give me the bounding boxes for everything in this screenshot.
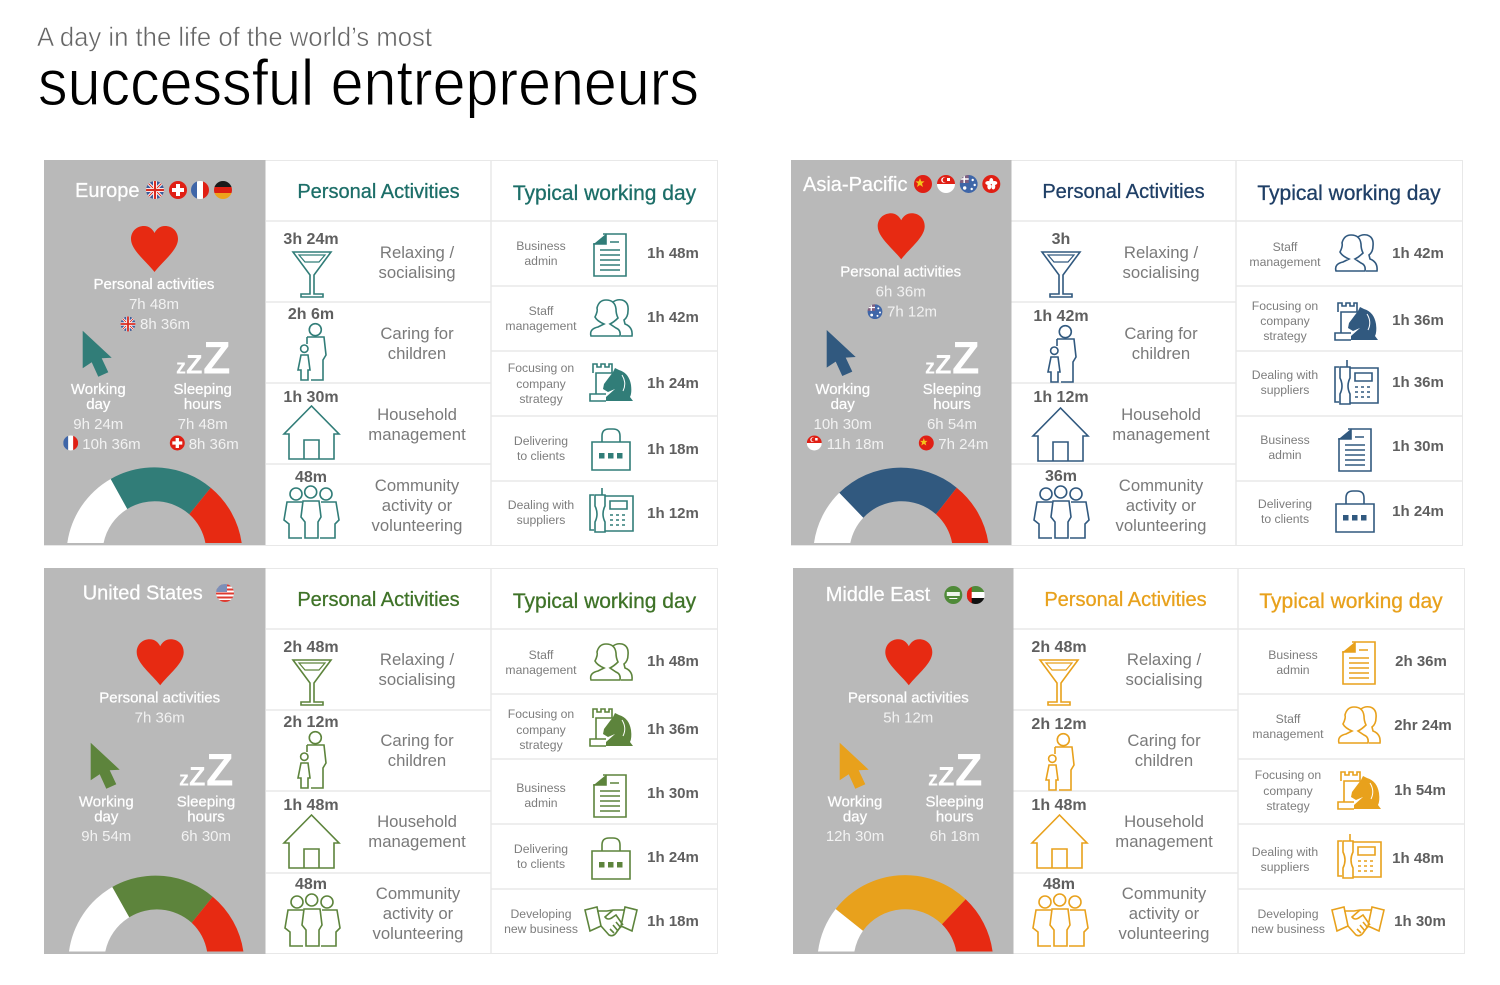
row: community: Community: [375, 476, 460, 495]
row: staff: [505, 644, 699, 680]
row: strategy: 1h 24m: [647, 375, 699, 392]
row: relaxing: [283, 231, 455, 297]
working day stat: day: [86, 396, 111, 413]
row: relaxing: 3h 24m: [283, 231, 339, 248]
row: community: activity or: [1126, 496, 1197, 515]
row: household: management: [368, 425, 466, 444]
working day stat: Working: [71, 381, 126, 398]
personal activities column: Asia-Pacific: [1033, 181, 1210, 538]
row: clients: [514, 838, 699, 879]
row: staff: Staff: [529, 304, 554, 318]
icon: heart: [885, 639, 932, 685]
row: relaxing: socialising: [379, 263, 455, 282]
heading: Personal Activities: [1044, 589, 1207, 611]
row: community: 48m: [295, 469, 327, 486]
row: community: 48m: [295, 876, 327, 893]
row: children: children: [388, 751, 446, 770]
icon: sleep: Z: [206, 745, 234, 796]
region name: Europe: [75, 180, 140, 202]
region name: Asia-Pacific: [803, 174, 907, 196]
row: strategy: company: [516, 377, 567, 391]
row: business admin: admin: [1276, 663, 1310, 677]
row: clients: [1258, 491, 1444, 532]
row: household: 1h 48m: [1031, 797, 1087, 814]
working day stat: Working: [828, 793, 882, 810]
row: clients: 1h 24m: [1392, 503, 1444, 520]
row: children: 2h 12m: [1031, 716, 1087, 733]
row: children: 2h 6m: [288, 306, 334, 323]
sleeping hours stat: 6h 54m: [927, 416, 977, 433]
row: business admin: 1h 30m: [647, 785, 699, 802]
row: clients: to clients: [517, 449, 565, 463]
summary column: Middle East: [793, 568, 1014, 954]
working day stat: 10h 30m: [814, 416, 872, 433]
icon: sleep: Z: [935, 349, 952, 379]
row: community: Community: [1119, 476, 1204, 495]
row: household: [1033, 389, 1210, 461]
sleeping hours stat: hours: [936, 809, 973, 826]
row: household: management: [1112, 425, 1210, 444]
icon: cursor: [83, 331, 112, 377]
icon: sleep: z: [176, 356, 186, 378]
icon: heart: [878, 213, 925, 259]
row: strategy: strategy: [519, 738, 564, 752]
summary column: Europe: [44, 160, 266, 545]
personal activities stat: [848, 690, 969, 727]
row: new business: 1h 18m: [647, 913, 699, 930]
row: relaxing: [283, 639, 455, 705]
working day stat: [807, 381, 884, 453]
working day stat: Working: [815, 381, 870, 398]
row: new business: [504, 907, 699, 936]
row: clients: Delivering: [514, 842, 568, 856]
row: relaxing: [1042, 231, 1199, 297]
personal activities stat: Personal activities: [94, 276, 214, 293]
typical working day column: Asia-Pacific: [1249, 182, 1444, 532]
row: business admin: 1h 30m: [1392, 438, 1444, 455]
row: community: activity or: [382, 496, 453, 515]
row: children: [283, 714, 454, 788]
flags: [944, 586, 985, 604]
row: suppliers: [1252, 360, 1444, 404]
row: strategy: Focusing on: [1255, 768, 1321, 782]
row: clients: [514, 429, 699, 470]
flag: [216, 584, 234, 602]
row: business admin: 2h 36m: [1395, 653, 1447, 670]
personal activities stat: [99, 690, 220, 727]
working day stat: [63, 381, 141, 453]
personal activities stat: 8h 36m: [140, 316, 190, 333]
panel: Asia-Pacific: [791, 160, 1462, 546]
row: household: [1031, 797, 1213, 868]
row: household: [283, 389, 466, 459]
row: new business: new business: [504, 922, 578, 936]
icon: sleep: z: [925, 356, 935, 378]
region name: United States: [83, 583, 203, 605]
flags: [146, 181, 232, 199]
title: successful entrepreneurs: [38, 46, 699, 119]
row: clients: to clients: [517, 857, 565, 871]
personal activities stat: Personal activities: [848, 690, 969, 707]
row: children: children: [1132, 344, 1190, 363]
row: community: [284, 469, 462, 538]
icon: sleep: Z: [938, 762, 954, 792]
working day stat: day: [843, 809, 868, 826]
row: strategy: 1h 36m: [647, 721, 699, 738]
row: community: volunteering: [1119, 924, 1209, 943]
row: business admin: [1268, 642, 1447, 684]
row: staff: 1h 48m: [647, 653, 699, 670]
row: children: children: [1135, 751, 1193, 770]
row: community: volunteering: [372, 516, 462, 535]
row: community: activity or: [1129, 904, 1200, 923]
subtitle: A day in the life of the world’s most: [37, 22, 432, 52]
icon: sleep: Z: [952, 332, 980, 383]
row: relaxing: Relaxing /: [380, 650, 454, 669]
working day stat: 9h 54m: [81, 828, 131, 845]
row: staff: management: [505, 663, 577, 677]
personal activities stat: 7h 36m: [135, 710, 185, 727]
icon: heart: [137, 639, 184, 685]
panel: United States: [44, 568, 718, 954]
heading: Personal Activities: [297, 181, 460, 203]
personal activities stat: [94, 276, 214, 333]
row: community: volunteering: [373, 924, 463, 943]
row: relaxing: 2h 48m: [1031, 639, 1087, 656]
personal activities stat: 5h 12m: [883, 710, 933, 727]
row: strategy: strategy: [1266, 799, 1311, 813]
row: community: 36m: [1045, 468, 1077, 485]
row: household: 1h 30m: [283, 389, 339, 406]
icon: sleep: z: [928, 769, 938, 791]
working day stat: 10h 36m: [82, 436, 141, 453]
row: household: management: [368, 832, 466, 851]
row: staff: management: [1252, 727, 1324, 741]
row: staff: Staff: [529, 648, 554, 662]
row: relaxing: 3h: [1052, 231, 1070, 248]
row: strategy: [508, 361, 699, 406]
icon: cursor: [827, 330, 856, 376]
row: children: Caring for: [1124, 324, 1198, 343]
row: household: [283, 797, 466, 868]
icon: sleep: z: [179, 769, 189, 791]
working day stat: day: [94, 809, 119, 826]
row: children: 2h 12m: [283, 714, 339, 731]
row: community: 48m: [1043, 876, 1075, 893]
row: suppliers: [508, 488, 699, 532]
heading: Typical working day: [1257, 182, 1441, 205]
typical working day column: Middle East: [1251, 590, 1452, 936]
personal activities stat: Personal activities: [99, 690, 220, 707]
personal activities stat: 7h 48m: [129, 296, 179, 313]
sleeping hours stat: Sleeping: [177, 793, 235, 810]
sleeping hours stat: Sleeping: [174, 381, 232, 398]
row: business admin: Business: [1268, 648, 1318, 662]
panel: Middle East: [793, 568, 1464, 954]
row: strategy: Focusing on: [508, 707, 574, 721]
gauge chart: [814, 468, 988, 543]
row: relaxing: Relaxing /: [1127, 650, 1201, 669]
row: relaxing: [1031, 639, 1202, 705]
heading: Personal Activities: [1042, 181, 1205, 203]
row: children: 1h 42m: [1033, 308, 1089, 325]
row: relaxing: socialising: [379, 670, 455, 689]
working day stat: [79, 793, 134, 845]
row: staff: [1249, 235, 1444, 271]
heading: Typical working day: [1259, 590, 1443, 613]
row: suppliers: suppliers: [1261, 383, 1309, 397]
sleeping hours stat: 7h 48m: [178, 416, 228, 433]
icon: sleep: Z: [203, 332, 230, 383]
row: community: Community: [1122, 884, 1207, 903]
row: children: [288, 306, 454, 380]
row: strategy: [1252, 299, 1444, 343]
sleeping hours stat: hours: [187, 809, 225, 826]
working day stat: 11h 18m: [827, 436, 884, 453]
sleeping hours stat: 6h 30m: [181, 828, 231, 845]
row: clients: Delivering: [514, 434, 568, 448]
region name: Middle East: [826, 584, 931, 606]
row: community: Community: [376, 884, 461, 903]
row: relaxing: 2h 48m: [283, 639, 339, 656]
sleeping hours stat: 7h 24m: [938, 436, 988, 453]
icon: cursor: [91, 743, 120, 789]
icon: sleep: Z: [189, 762, 206, 792]
sleeping hours stat: 6h 18m: [930, 828, 980, 845]
row: children: Caring for: [1127, 731, 1201, 750]
sleeping hours stat: hours: [933, 396, 971, 413]
personal activities column: United States: [283, 589, 466, 946]
row: household: 1h 12m: [1033, 389, 1089, 406]
row: strategy: Focusing on: [1252, 299, 1318, 313]
row: staff: [505, 300, 699, 336]
row: new business: [1251, 907, 1446, 936]
row: children: [1031, 716, 1201, 790]
icon: heart: [131, 226, 178, 272]
row: staff: 1h 42m: [647, 309, 699, 326]
row: business admin: admin: [524, 796, 558, 810]
typical working day column: United States: [504, 590, 699, 936]
heading: Typical working day: [513, 182, 697, 205]
row: strategy: strategy: [1263, 329, 1308, 343]
row: business admin: 1h 48m: [647, 245, 699, 262]
row: strategy: company: [516, 723, 567, 737]
working day stat: [826, 793, 884, 845]
row: business admin: [516, 234, 699, 276]
row: new business: 1h 30m: [1394, 913, 1446, 930]
row: strategy: [1255, 768, 1446, 813]
sleeping hours stat: 8h 36m: [189, 436, 239, 453]
row: suppliers: 1h 36m: [1392, 374, 1444, 391]
flags: [914, 175, 1000, 193]
personal activities column: Middle East: [1031, 589, 1213, 946]
row: clients: Delivering: [1258, 497, 1312, 511]
summary column: United States: [44, 568, 266, 954]
row: community: [1033, 876, 1209, 946]
row: household: Household: [377, 405, 457, 424]
row: clients: to clients: [1261, 512, 1309, 526]
working day stat: 9h 24m: [73, 416, 123, 433]
row: staff: 2hr 24m: [1394, 717, 1452, 734]
row: strategy: strategy: [519, 392, 564, 406]
row: children: [1033, 308, 1198, 382]
row: business admin: [516, 775, 699, 817]
working day stat: 12h 30m: [826, 828, 884, 845]
row: suppliers: Dealing with: [1252, 845, 1318, 859]
sleeping hours stat: hours: [184, 396, 221, 413]
row: staff: [1252, 707, 1452, 743]
row: strategy: 1h 36m: [1392, 312, 1444, 329]
summary column: Asia-Pacific: [791, 160, 1012, 545]
sleeping hours stat: [919, 381, 988, 453]
row: household: Household: [377, 812, 457, 831]
row: strategy: Focusing on: [508, 361, 574, 375]
row: relaxing: socialising: [1123, 263, 1199, 282]
row: business admin: [1260, 429, 1444, 471]
typical working day column: Europe: [505, 182, 699, 532]
sleeping hours stat: Sleeping: [926, 793, 984, 810]
row: community: [1034, 468, 1206, 538]
row: suppliers: suppliers: [1261, 860, 1309, 874]
personal activities stat: Personal activities: [840, 263, 961, 280]
row: children: children: [388, 344, 446, 363]
row: staff: management: [1249, 255, 1321, 269]
gauge chart: [67, 467, 242, 543]
row: community: activity or: [383, 904, 454, 923]
row: strategy: [508, 707, 699, 752]
row: suppliers: suppliers: [517, 513, 565, 527]
row: new business: Developing: [511, 907, 571, 921]
icon: cursor: [840, 743, 869, 789]
row: community: volunteering: [1116, 516, 1206, 535]
row: clients: 1h 24m: [647, 849, 699, 866]
row: business admin: admin: [1268, 448, 1302, 462]
row: business admin: Business: [1260, 433, 1310, 447]
row: suppliers: Dealing with: [508, 498, 574, 512]
row: suppliers: 1h 48m: [1392, 850, 1444, 867]
row: suppliers: 1h 12m: [647, 505, 699, 522]
heading: Personal Activities: [297, 589, 460, 611]
sleeping hours stat: [926, 793, 984, 845]
row: business admin: Business: [516, 781, 566, 795]
row: household: 1h 48m: [283, 797, 339, 814]
row: business admin: admin: [524, 254, 558, 268]
personal activities stat: [840, 263, 961, 321]
row: relaxing: socialising: [1126, 670, 1202, 689]
personal activities stat: 7h 12m: [887, 304, 937, 321]
personal activities column: Europe: [283, 181, 466, 538]
icon: sleep: Z: [955, 745, 982, 796]
heading: Typical working day: [513, 590, 697, 613]
row: household: Household: [1124, 812, 1204, 831]
row: new business: new business: [1251, 922, 1325, 936]
row: strategy: company: [1260, 314, 1311, 328]
panel: Europe: [44, 160, 718, 546]
row: strategy: 1h 54m: [1394, 782, 1446, 799]
row: household: management: [1115, 832, 1213, 851]
row: suppliers: [1252, 834, 1444, 878]
row: staff: Staff: [1276, 712, 1301, 726]
row: children: Caring for: [380, 324, 454, 343]
row: staff: 1h 42m: [1392, 245, 1444, 262]
row: staff: Staff: [1273, 240, 1298, 254]
gauge chart: [818, 875, 993, 952]
row: business admin: Business: [516, 239, 566, 253]
working day stat: Working: [79, 793, 134, 810]
icon: sleep: Z: [186, 349, 202, 379]
sleeping hours stat: Sleeping: [923, 381, 981, 398]
sleeping hours stat: [170, 381, 239, 453]
row: suppliers: Dealing with: [1252, 368, 1318, 382]
gauge chart: [69, 876, 243, 952]
row: community: [285, 876, 463, 946]
sleeping hours stat: [177, 793, 235, 845]
personal activities stat: 6h 36m: [876, 283, 926, 300]
row: relaxing: Relaxing /: [380, 243, 454, 262]
row: clients: 1h 18m: [647, 441, 699, 458]
row: children: Caring for: [380, 731, 454, 750]
row: strategy: company: [1263, 784, 1314, 798]
working day stat: day: [831, 396, 855, 413]
row: household: Household: [1121, 405, 1201, 424]
row: new business: Developing: [1258, 907, 1318, 921]
row: staff: management: [505, 319, 577, 333]
row: relaxing: Relaxing /: [1124, 243, 1198, 262]
